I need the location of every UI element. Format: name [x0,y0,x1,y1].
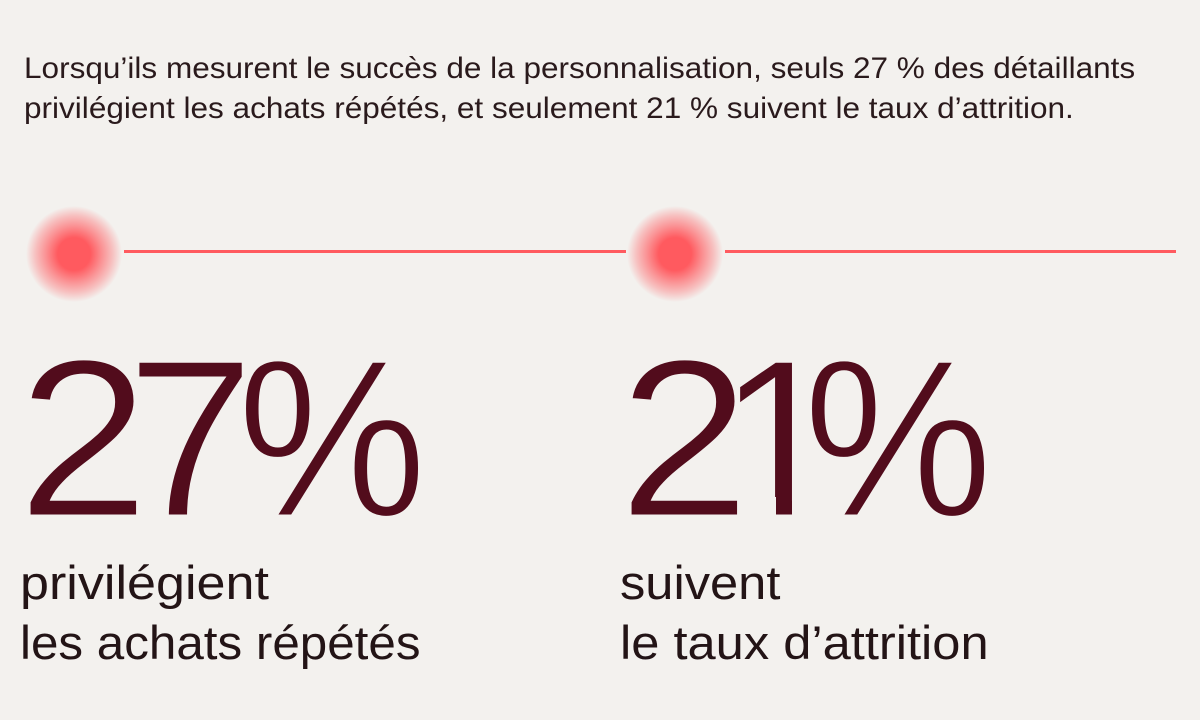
intro text: privilégient les achats répétés, et seulement 21 % suivent le taux d’attrition. [24,92,1074,125]
timeline line: first [124,250,626,253]
intro text [24,52,1135,125]
label: repeat purchases: privilégient [20,556,269,609]
label: repeat purchases [20,556,421,669]
glowing dot: first marker [26,206,122,302]
intro text: Lorsqu’ils mesurent le succès de la personnalisation, seuls 27 % des détaillants [24,52,1135,85]
statistic: 21%: 1 [717,312,842,564]
statistic: 21%: 2 [618,312,751,564]
statistic: 27%: % [237,312,427,564]
statistic: 21%: % [803,312,993,564]
timeline line: second [725,250,1176,253]
statistic: 21% [618,312,993,564]
label: churn rate: le taux d’attrition [620,616,989,669]
label: repeat purchases: les achats répétés [20,616,421,669]
label: churn rate: suivent [620,556,780,609]
statistic: 27%: 2 [17,312,150,564]
statistic: 27% [17,312,427,564]
statistic: 27%: 7 [126,312,255,564]
label: churn rate [620,556,989,669]
glowing dot: second marker [627,206,723,302]
